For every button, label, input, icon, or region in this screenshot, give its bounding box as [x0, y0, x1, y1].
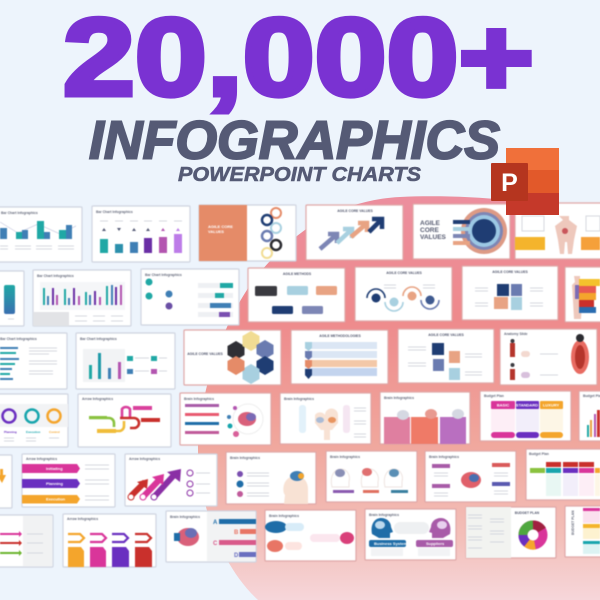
card: cycle icons [0, 394, 68, 447]
card: two heads [280, 393, 371, 444]
card: arrow labels [22, 454, 115, 507]
card: arrow stub [0, 455, 12, 508]
card: cycle icons: Planning [4, 430, 17, 434]
card: circle values [413, 204, 510, 259]
card: cylinder [0, 271, 24, 326]
card: brain center [425, 451, 516, 502]
card: hexagons [184, 330, 281, 385]
card: squares process: AGILE CORE VALUES [492, 270, 529, 274]
card: budget columns: STANDARD [516, 402, 538, 408]
card: arrows with grey side [0, 515, 53, 567]
card: heads business: Brain Infographics [369, 513, 399, 517]
card: bar chart 4: Bar Chart Infographics [80, 337, 117, 341]
card: anatomy bars [565, 267, 600, 322]
card: arrows: AGILE CORE VALUES [337, 209, 374, 213]
card: three panels: Brain Infographics [384, 396, 414, 400]
card: arrows [306, 205, 403, 260]
card: cycle icons: Execution [26, 430, 41, 434]
heading: INFOGRAPHICS: INFOGRAPHICS [89, 110, 500, 170]
card: brain letters: C [213, 541, 218, 547]
card: budget columns: BASIC [497, 402, 509, 408]
card: head icons: Brain Infographics [230, 456, 260, 460]
card: arrow labels: Initiating [46, 466, 63, 471]
card: horizontal bars left [0, 333, 67, 389]
brain and lower pink cards [180, 391, 600, 561]
card: budget bars [579, 391, 600, 441]
card: speech bubbles [265, 510, 356, 561]
card: anatomy organs: Anatomy Slide [504, 332, 528, 336]
card: arrow labels: Execution [46, 496, 66, 502]
card: budget list: BUDGET PLAN [571, 510, 575, 535]
card: bar chart 4 [76, 333, 175, 389]
icon: PowerPoint logo: P [501, 169, 518, 197]
card: brain letters [166, 511, 256, 562]
pink region cards [184, 203, 600, 385]
card: budget donut [466, 507, 556, 558]
card: budget columns [480, 391, 571, 441]
card: anatomy yellow [515, 203, 600, 259]
card: stair arrows: Arrow Infographics [129, 457, 160, 461]
card: bar chart 1 [0, 207, 82, 262]
card: agile methods: AGILE METHODS [283, 272, 312, 276]
card: three heads [326, 451, 417, 502]
card: budget columns: LUXURY [543, 402, 559, 408]
card: squares flow [398, 329, 494, 383]
card: head icons [226, 452, 316, 504]
card: circle values: AGILE [420, 220, 441, 227]
card: methodologies list: AGILE METHODOLOGIES [319, 334, 361, 338]
card: budget table [526, 449, 600, 500]
card: heads business: Business System [374, 541, 408, 546]
card: brain letters: A [213, 520, 218, 526]
card: brain letters: B [234, 530, 239, 536]
card: gears: AGILE CORE VALUES [386, 271, 423, 275]
card: agile core values orange: VALUES [208, 229, 224, 234]
icon: PowerPoint logo [491, 148, 559, 215]
card: brain center: Brain Infographics [429, 455, 459, 459]
card: horizontal bars left: Bar Chart Infographics [0, 337, 37, 341]
card: arrow labels: Arrow Infographics [26, 457, 57, 461]
card: columns [63, 514, 156, 567]
card: squares process [462, 266, 558, 320]
card: heads business [365, 509, 456, 560]
card: three panels [380, 392, 470, 444]
card: circle values: VALUES [420, 234, 447, 241]
card: budget list [565, 506, 600, 557]
card: two heads: Brain Infographics [284, 397, 314, 401]
card: three heads: Brain Infographics [330, 455, 360, 459]
slide thumbnails grid [0, 203, 600, 567]
card: bar clusters [33, 270, 131, 326]
card: budget donut: BUDGET PLAN [515, 511, 540, 515]
card: bar chart 1: Bar Chart Infographics [1, 211, 38, 215]
card: heads business: Suppliers [426, 541, 445, 546]
card: pinwheel arrows: Arrow Infographics [82, 397, 113, 401]
card: budget columns: Budget Plan [484, 394, 504, 398]
card: gears [355, 267, 452, 321]
card: brain letters: Brain Infographics [170, 515, 200, 519]
card: brain list: Brain Infographics [184, 397, 214, 401]
card: speech bubbles: Brain Infographics [269, 514, 299, 518]
pink background blob [198, 196, 600, 600]
card: budget table: Budget Plan [529, 452, 549, 456]
card: squares flow: AGILE CORE VALUES [428, 333, 465, 337]
card: bars with circles [141, 269, 239, 325]
card: bar chart 2: Bar Chart Infographics [96, 210, 133, 214]
card: stair arrows [125, 454, 217, 506]
subheading: POWERPOINT CHARTS: POWERPOINT CHARTS [178, 163, 421, 186]
card: agile core values orange: AGILE CORE [208, 224, 233, 229]
card: pinwheel arrows [78, 394, 171, 447]
card: arrow labels: Planning [46, 481, 63, 486]
card: bars with circles: Bar Chart Infographics [145, 273, 182, 277]
card: anatomy organs [500, 329, 597, 385]
card: circle values: CORE [420, 227, 439, 234]
card: brain letters: D [234, 553, 239, 559]
card: cycle icons: Control [49, 430, 60, 434]
card: agile methods [248, 268, 345, 322]
card: agile core values orange [199, 205, 296, 261]
card: bar chart 2 [92, 206, 190, 262]
card: methodologies list [291, 330, 388, 384]
card: hexagons: AGILE CORE VALUES [187, 352, 224, 356]
card: brain list [180, 393, 271, 445]
card: columns: Arrow Infographics [67, 517, 98, 521]
card: bar clusters: Bar Chart Infographics [37, 274, 74, 278]
